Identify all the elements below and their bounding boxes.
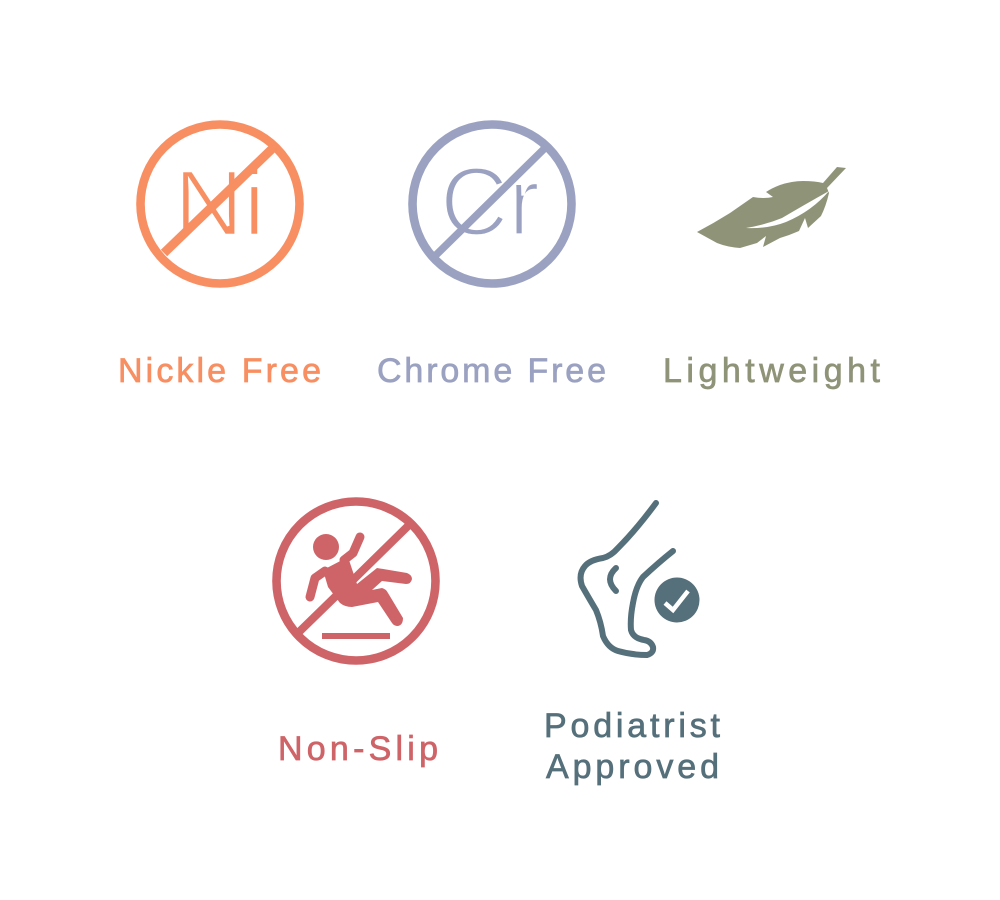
icon: chrome free [412, 124, 572, 284]
floor line [322, 633, 390, 639]
icon: non-slip [276, 502, 436, 660]
label: Lightweight: Lightweight [663, 352, 881, 390]
label: Podiatrist Approved: Approved [546, 748, 719, 786]
icon: nickel free [140, 124, 300, 284]
head [313, 534, 339, 560]
label: Nickle Free: Nickle Free [118, 352, 321, 390]
slash [299, 526, 408, 632]
icon: nickel free: Ni [174, 151, 265, 255]
label: Podiatrist Approved [544, 707, 721, 786]
label: Podiatrist Approved: Podiatrist [544, 707, 721, 745]
icon: feather [697, 167, 846, 248]
arms [310, 537, 360, 597]
body and right leg [323, 557, 412, 626]
label: Chrome Free: Chrome Free [377, 352, 606, 390]
icon: chrome free: Cr [440, 147, 540, 256]
label: Non-Slip: Non-Slip [278, 730, 438, 768]
icon: foot with check [581, 503, 700, 655]
